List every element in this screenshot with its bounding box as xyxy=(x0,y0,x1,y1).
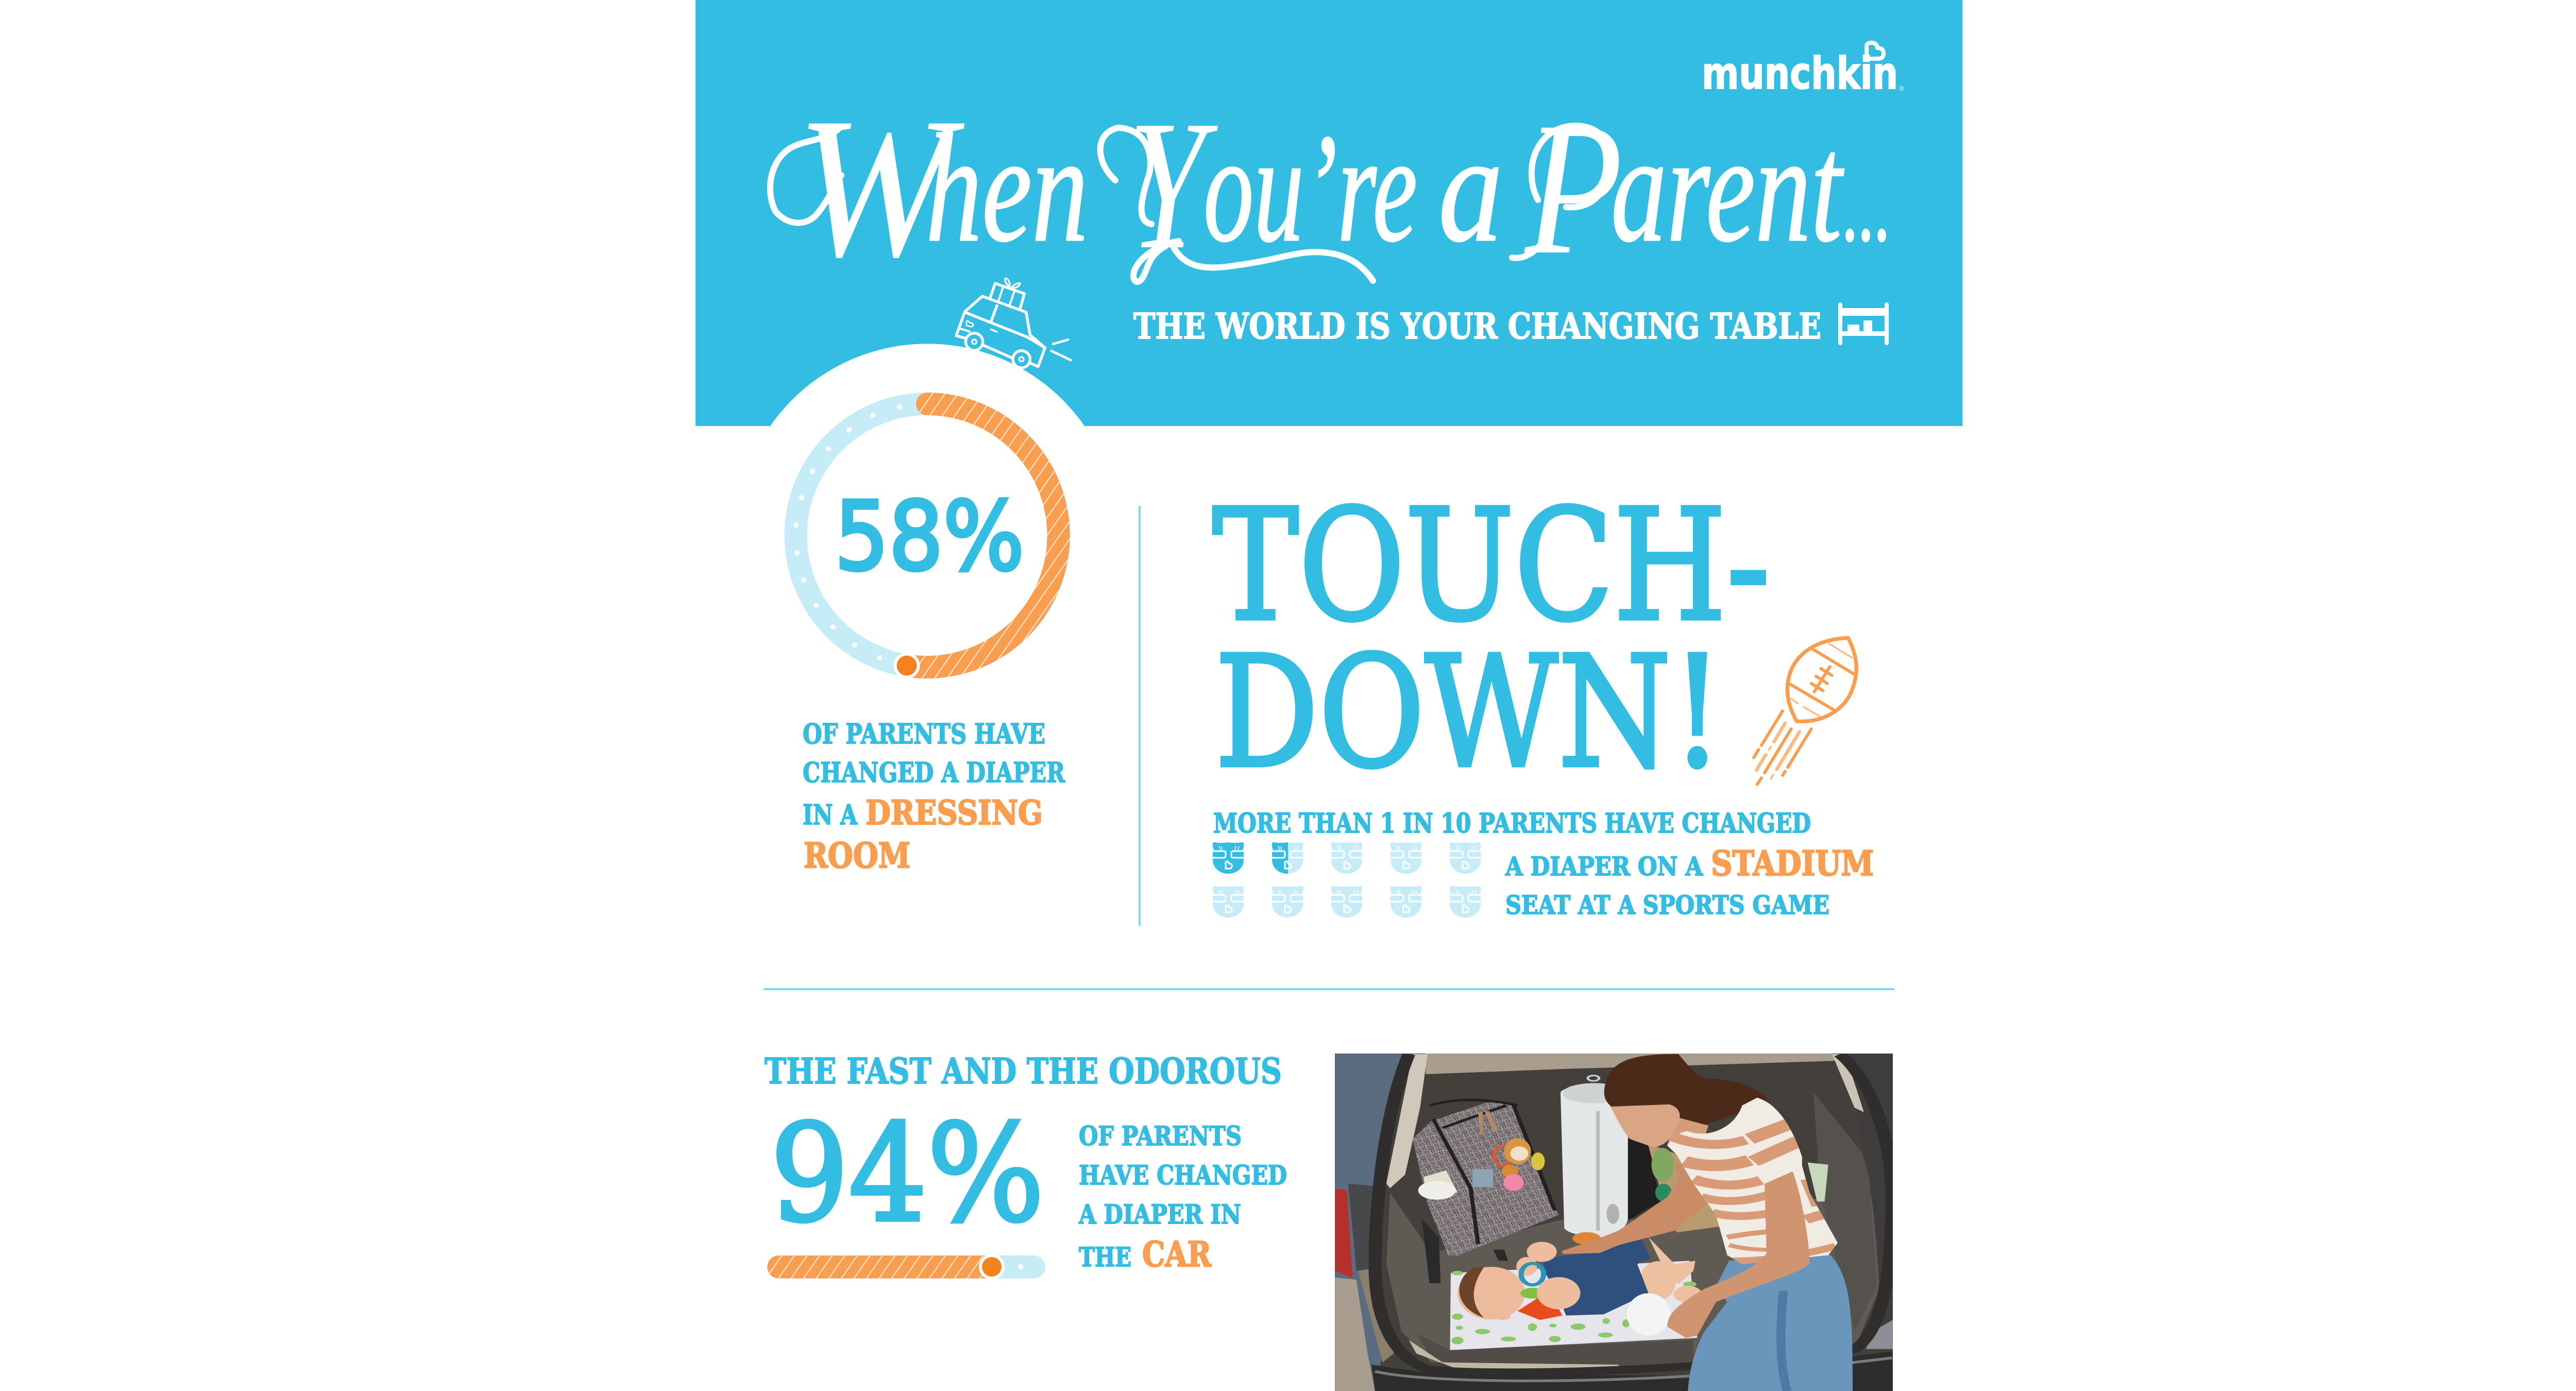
stadium caption xyxy=(1213,808,1874,920)
title: P xyxy=(1522,83,1623,294)
panel: 58 percent dressing room xyxy=(793,404,1065,876)
panel: fast and odorous xyxy=(765,1051,1287,1280)
dressing room caption: ROOM xyxy=(804,835,910,876)
title xyxy=(770,76,1891,299)
title: W xyxy=(796,76,967,299)
dressing room caption: DRESSING xyxy=(866,793,1043,833)
touchdown headline xyxy=(1212,477,1770,802)
dressing room caption: IN A xyxy=(803,799,858,831)
car caption: A DIAPER IN xyxy=(1078,1199,1241,1230)
progress ring xyxy=(793,404,1059,679)
icon: car with gift xyxy=(956,278,1071,368)
stadium caption: STADIUM xyxy=(1711,843,1874,884)
stadium caption: A DIAPER ON A xyxy=(1505,851,1703,881)
title: ou’re xyxy=(1204,103,1417,274)
car caption: THE xyxy=(1079,1242,1131,1273)
icon array: ten diapers xyxy=(1212,842,1481,918)
header band xyxy=(696,0,1962,426)
title: hen xyxy=(926,103,1088,274)
progress bar xyxy=(767,1254,1045,1280)
divider xyxy=(1139,506,1141,926)
title: Y xyxy=(1128,82,1219,287)
stadium caption: SEAT AT A SPORTS GAME xyxy=(1505,890,1829,920)
car caption: HAVE CHANGED xyxy=(1079,1160,1287,1191)
car caption: CAR xyxy=(1142,1234,1212,1275)
stadium caption: MORE THAN 1 IN 10 PARENTS HAVE CHANGED xyxy=(1213,808,1811,839)
title: arent xyxy=(1611,103,1845,274)
section heading: THE FAST AND THE ODOROUS xyxy=(765,1051,1282,1092)
panel: touchdown xyxy=(1212,477,1874,920)
infographic canvas xyxy=(696,0,1962,1391)
photo: parent changing baby in car boot xyxy=(1319,1041,1906,1391)
car caption xyxy=(1078,1121,1287,1275)
touchdown headline: TOUCH- xyxy=(1212,477,1770,655)
touchdown headline: DOWN! xyxy=(1215,623,1723,802)
94 percent figure: 94% xyxy=(770,1096,1044,1252)
subtitle: THE WORLD IS YOUR CHANGING TABLE xyxy=(1133,306,1821,347)
munchkin logo: munchkin xyxy=(1702,48,1898,99)
munchkin logo: ® xyxy=(1899,84,1904,92)
title: ... xyxy=(1843,149,1891,263)
car caption: OF PARENTS xyxy=(1079,1121,1242,1152)
title flourishes xyxy=(770,126,1612,282)
header background xyxy=(696,0,1962,426)
icon: changing table xyxy=(1838,302,1889,345)
white arch behind ring xyxy=(770,344,1084,426)
title: a xyxy=(1438,103,1503,274)
dressing room caption: CHANGED A DIAPER xyxy=(803,757,1065,789)
icon: football xyxy=(1754,638,1856,785)
58 percent figure: 58% xyxy=(835,482,1024,592)
dressing room caption xyxy=(803,718,1065,876)
dressing room caption: OF PARENTS HAVE xyxy=(803,718,1045,750)
